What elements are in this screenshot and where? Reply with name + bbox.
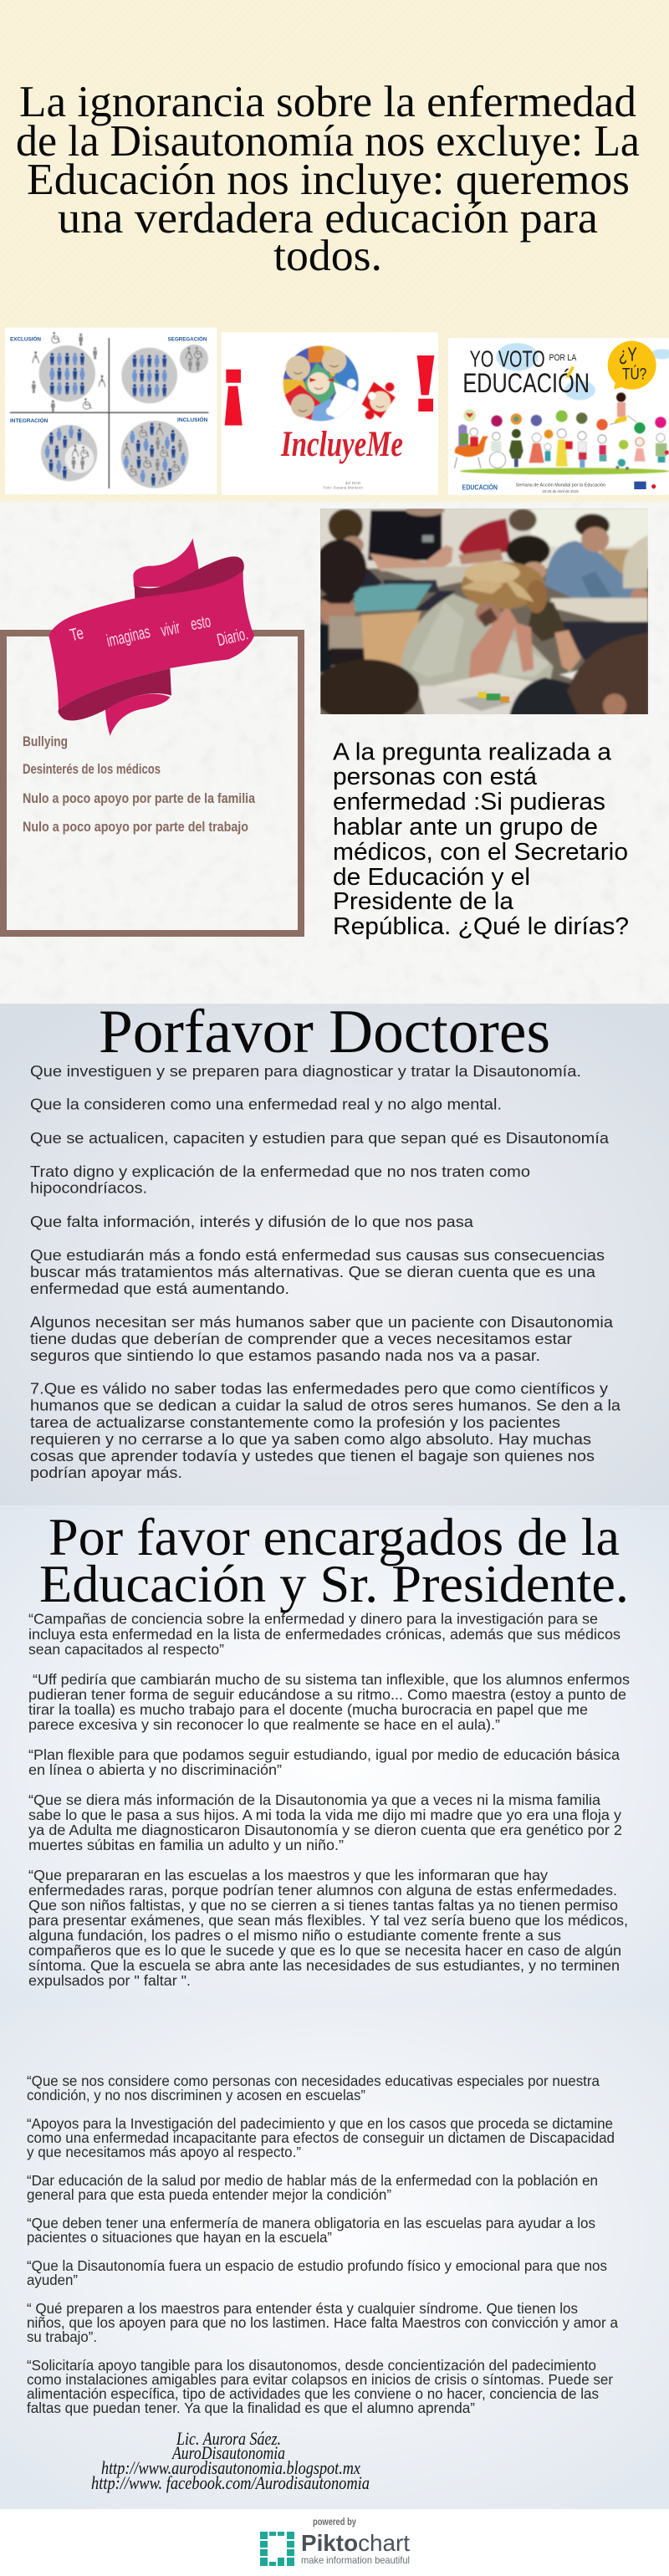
text block: requests to education officials: muertes súbitas en familia un adulto y un niño.” (28, 1837, 344, 1853)
icon: Piktochart logo mark (260, 2532, 294, 2566)
ribbon text (68, 611, 250, 651)
text block: requests to education officials (28, 1611, 630, 1989)
text block: question to patients (333, 739, 629, 940)
text block: requests to education officials: alguna fundación, los padres o el mismo niño o estudiante comente frente a sus (28, 1927, 561, 1944)
image: exclusion, segregation, integration and inclusion diagram: INTEGRACIÓN (10, 417, 48, 424)
text block: requests to doctors: Que estudiarán más a fondo está enfermedad sus causas sus consecuencias (30, 1246, 605, 1264)
footer: powered by Piktochart: powered by (313, 2516, 356, 2527)
text block: requests to education officials: para presentar exámenes, que sean más flexibles. Y tal vez sería bueno que los médicos, (28, 1912, 628, 1929)
heading: education officials and president (39, 1508, 629, 1613)
text block: requests to education officials: incluya esta enfermedad en la lista de enfermedades crónicas, además que sus médicos (28, 1626, 620, 1643)
text block: requests to education officials: ya de Adulta me diagnosticaron Disautonomía y se dieron cuenta que era genético por 2 (28, 1822, 622, 1838)
text block: further requests: su trabajo”. (27, 2328, 97, 2345)
text block: further requests: faltas que puedan tener. Ya que la finalidad es que el alumno aprenda” (27, 2400, 475, 2416)
title: una verdadera educación para (58, 194, 598, 243)
ribbon text: esto (189, 611, 212, 634)
icon: puzzle of children faces (283, 345, 396, 424)
text block: requests to education officials: Que son niños faltistas, y que no se cierren a si tienes tantas faltas ya no tienen permiso (28, 1897, 618, 1914)
text block: further requests: “Que se nos considere como personas con necesidades educativas especiales por nuestra (27, 2073, 600, 2089)
image: exclusion, segregation, integration and inclusion diagram: SEGREGACIÓN (168, 335, 207, 342)
ribbon text: vivir (159, 618, 181, 641)
image: Yo voto por la educación poster (448, 338, 669, 495)
speech bubble: TÚ? (622, 364, 647, 383)
text block: requests to doctors: buscar más tratamientos más alternativas. Que se dieran cuenta que es una (30, 1263, 596, 1280)
text block: requests to education officials: “Plan flexible para que podamos seguir estudiando, igual por medio de educación básica (28, 1746, 620, 1763)
text block: requests to doctors: tiene dudas que deberían de comprender que a veces necesitamos estar (30, 1330, 572, 1347)
text block: further requests: y que necesitamos más apoyo al respecto.” (27, 2144, 301, 2160)
heading: education officials and president: Educación y Sr. Presidente. (39, 1555, 629, 1613)
speech bubble: ¿Y (619, 344, 637, 365)
text block: further requests: alimentación específica, tipo de actividades que les conviene o no hacer, conciencia de las (27, 2385, 599, 2402)
text block: further requests: pacientes o situaciones que hayan en la escuela” (27, 2229, 332, 2246)
text block: requests to education officials: síntoma. Que la escuela se abra ante las necesidades de sus estudiantes, y no terminen (28, 1957, 620, 1974)
poster footer: EDUCACIÓN (462, 484, 498, 492)
signature (91, 2428, 370, 2493)
heading: doctors: Porfavor Doctores (99, 998, 550, 1066)
text block: question to patients: enfermedad :Si pudieras (333, 789, 605, 815)
text block: requests to education officials: en línea o abierta y no discriminación” (28, 1761, 282, 1778)
text block: requests to education officials: sean capacitados al respecto” (28, 1641, 224, 1658)
text block: further requests: condición, y no nos discriminen y acosen en escuelas” (27, 2087, 365, 2103)
text block: question to patients: de Educación y el (333, 864, 530, 891)
poster footer (462, 482, 656, 493)
text block: requests to doctors: hipocondríacos. (30, 1179, 147, 1196)
text block: requests to education officials: “Uff pediría que cambiarán mucho de su sistema tan inflexible, que los alumnos enfermos (33, 1671, 630, 1688)
text block: question to patients: Presidente de la (333, 888, 514, 915)
title (16, 78, 640, 280)
text block: requests to doctors: 7.Que es válido no saber todas las enfermedades pero que como científicos y (30, 1380, 609, 1397)
text block: requests to doctors: Que la consideren como una enfermedad real y no algo mental. (30, 1096, 502, 1112)
text block: further requests: “Apoyos para la Investigación del padecimiento y que en los casos que proceda se dictamine (27, 2115, 613, 2132)
list: daily difficulties: Desinterés de los médicos (23, 761, 161, 777)
illustrated people on the ground (454, 392, 669, 474)
text block: question to patients: A la pregunta realizada a (333, 739, 612, 766)
footer: powered by Piktochart: make information beautiful (301, 2554, 410, 2566)
speech bubble (608, 341, 656, 390)
text block: requests to doctors: seguros que sintiendo lo que estamos pasando nada nos va a pasar. (30, 1347, 540, 1364)
text block: further requests: “Que la Disautonomía fuera un espacio de estudio profundo físico y emocional para que nos (27, 2257, 607, 2274)
title: La ignorancia sobre la enfermedad (19, 78, 636, 126)
title: de la Disautonomía nos excluye: La (16, 117, 640, 166)
text block: requests to doctors: Trato digno y explicación de la enfermedad que no nos traten como (30, 1163, 530, 1180)
footer: powered by Piktochart: Piktochart (301, 2530, 410, 2556)
panel: doctors background (0, 1004, 669, 1505)
ribbon text: Te (68, 623, 85, 646)
panel: daily difficulties frame (3, 633, 301, 933)
image: exclusion, segregation, integration and inclusion diagram: EXCLUSIÓN (10, 335, 41, 342)
text block: further requests: “Solicitaría apoyo tangible para los disautonomos, desde concientización del padecimiento (27, 2357, 596, 2374)
poster headline: EDUCACIÓN (462, 367, 590, 398)
signature: http://www. facebook.com/Aurodisautonomia (91, 2472, 370, 2493)
title: Educación nos incluye: queremos (27, 156, 630, 204)
text block: further requests: como una enfermedad incapacitante para efectos de conseguir un dictamen de Discapacidad (27, 2129, 615, 2146)
text block: requests to doctors: Que falta información, interés y difusión de lo que nos pasa (30, 1213, 474, 1230)
footer: powered by Piktochart (260, 2516, 410, 2566)
icon: exclamation mark (417, 355, 434, 411)
text block: requests to doctors: enfermedad que está aumentando. (30, 1280, 289, 1297)
text block: further requests: general para que esta pueda entender mejor la condición” (27, 2186, 391, 2203)
list: daily difficulties: Nulo a poco apoyo por parte de la familia (23, 790, 255, 806)
ribbon text: imaginas (105, 622, 152, 651)
poster footer: Semana de Acción Mundial por la Educación (516, 483, 605, 488)
text block: requests to doctors: humanos que se dedican a cuidar la salud de otros seres humanos. Se den a la (30, 1397, 621, 1413)
text block: further requests: niños, que los apoyen para que no los lastimen. Hace falta Maestros con convicción y amor a (27, 2314, 618, 2331)
text block: further requests: “Dar educación de la salud por medio de hablar más de la enfermedad con la población en (27, 2172, 598, 2189)
signature: Lic. Aurora Sáez. (176, 2428, 281, 2449)
poster headline: POR LA (549, 353, 577, 363)
logo text: IncluyeMe (280, 424, 403, 464)
text block: requests to doctors: Que se actualicen, capaciten y estudien para que sepan qué es Disautonomía (30, 1129, 610, 1147)
text block: requests to doctors: podrían apoyar más. (30, 1464, 182, 1481)
signature: http://www.aurodisautonomia.blogspot.mx (101, 2457, 360, 2478)
heading: education officials and president: Por favor encargados de la (49, 1508, 620, 1567)
text block: further requests: “Que deben tener una enfermería de manera obligatoria en las escuelas para ayudar a los (27, 2215, 595, 2231)
text block: requests to doctors (30, 1062, 621, 1481)
banner ribbon (49, 538, 254, 736)
text block: question to patients: hablar ante un grupo de (333, 814, 598, 841)
poster headline: YO VOTO (470, 345, 545, 371)
text block: requests to education officials: “Campañas de conciencia sobre la enfermedad y dinero para la investigación para se (28, 1611, 598, 1628)
signature: AuroDisautonomia (171, 2442, 285, 2463)
text block: requests to education officials: compañeros que es lo que le sucede y que es lo que se necesita hacer en caso de algún (28, 1942, 621, 1959)
text block: requests to education officials: enfermedades raras, porque podrían tener alumnos con alguna de estas enfermedades. (28, 1882, 617, 1899)
list: daily difficulties: Bullying (23, 733, 68, 749)
photo credit (323, 481, 363, 491)
panel: daily life background (0, 502, 669, 1004)
text block: requests to education officials: expulsados por " faltar ". (28, 1972, 191, 1989)
panel: footer background (0, 2509, 669, 2576)
text block: further requests (27, 2073, 618, 2416)
panel: education officials background (0, 1505, 669, 2007)
photo credit: Foto: Susana Montecó (323, 486, 363, 491)
text block: requests to education officials: pudieran tener forma de seguir educándose a su ritmo... Como maestra (estoy a punto de (28, 1686, 626, 1703)
text block: question to patients: República. ¿Qué le dirías? (333, 913, 629, 940)
poster headline (462, 345, 590, 398)
list: daily difficulties (23, 733, 255, 835)
image: exclusion, segregation, integration and inclusion diagram: INCLUSIÓN (177, 417, 207, 423)
image: exclusion, segregation, integration and inclusion diagram (5, 328, 217, 494)
panel: further requests background (0, 2007, 669, 2509)
text block: requests to education officials: parece excesiva y sin reconocer lo que realmente se hace en el aula).” (28, 1716, 500, 1733)
text block: requests to education officials: “Que prepararan en las escuelas a los maestros y que les informaran que hay (28, 1867, 548, 1883)
text block: further requests: “ Qué preparen a los maestros para entender ésta y cualquier síndrome. Que tienen los (27, 2300, 578, 2317)
poster footer: 20-26 de Abril de 2015 (542, 489, 579, 493)
clouds (496, 343, 669, 400)
text block: requests to education officials: “Que se diera más información de la Disautonomia ya que a veces ni la misma familia (28, 1791, 600, 1808)
text block: requests to doctors: Que investiguen y se preparen para diagnosticar y tratar la Disautonomía. (30, 1062, 581, 1080)
photo credit: del DCE. (345, 481, 362, 486)
text block: requests to education officials: tirar la toalla) es mucho trabajo para el docente (mucha burocracia en papel que me (28, 1701, 588, 1718)
image: distressed student in classroom (320, 509, 648, 714)
ribbon text: Diario. (215, 624, 250, 650)
title: todos. (273, 232, 382, 280)
text block: requests to doctors: tarea de actualizarse constantemente como la profesión y los pacientes (30, 1413, 560, 1431)
text block: requests to doctors: requieren y no cerrarse a lo que ya saben como algo absoluto. Hay muchas (30, 1430, 591, 1448)
text block: requests to doctors: cosas que aprender todavía y ustedes que tienen el bagaje son quienes nos (30, 1447, 595, 1464)
panel: title background (0, 0, 669, 502)
text block: question to patients: médicos, con el Secretario (333, 839, 628, 866)
text block: further requests: como instalaciones amigables para evitar colapsos en inicios de crisis o síntomas. Puede ser (27, 2371, 613, 2388)
list: daily difficulties: Nulo a poco apoyo por parte del trabajo (23, 819, 248, 835)
text block: requests to doctors: Algunos necesitan ser más humanos saber que un paciente con Disautonomia (30, 1313, 614, 1331)
text block: question to patients: personas con está (333, 764, 538, 790)
text block: requests to education officials: sabe lo que le pasa a sus hijos. A mi toda la vida me dijo mi madre que yo era una floja y (28, 1807, 621, 1823)
image: IncluyeMe logo (222, 332, 438, 495)
text block: further requests: ayuden” (27, 2272, 78, 2288)
icon: inverted exclamation mark (225, 370, 243, 426)
